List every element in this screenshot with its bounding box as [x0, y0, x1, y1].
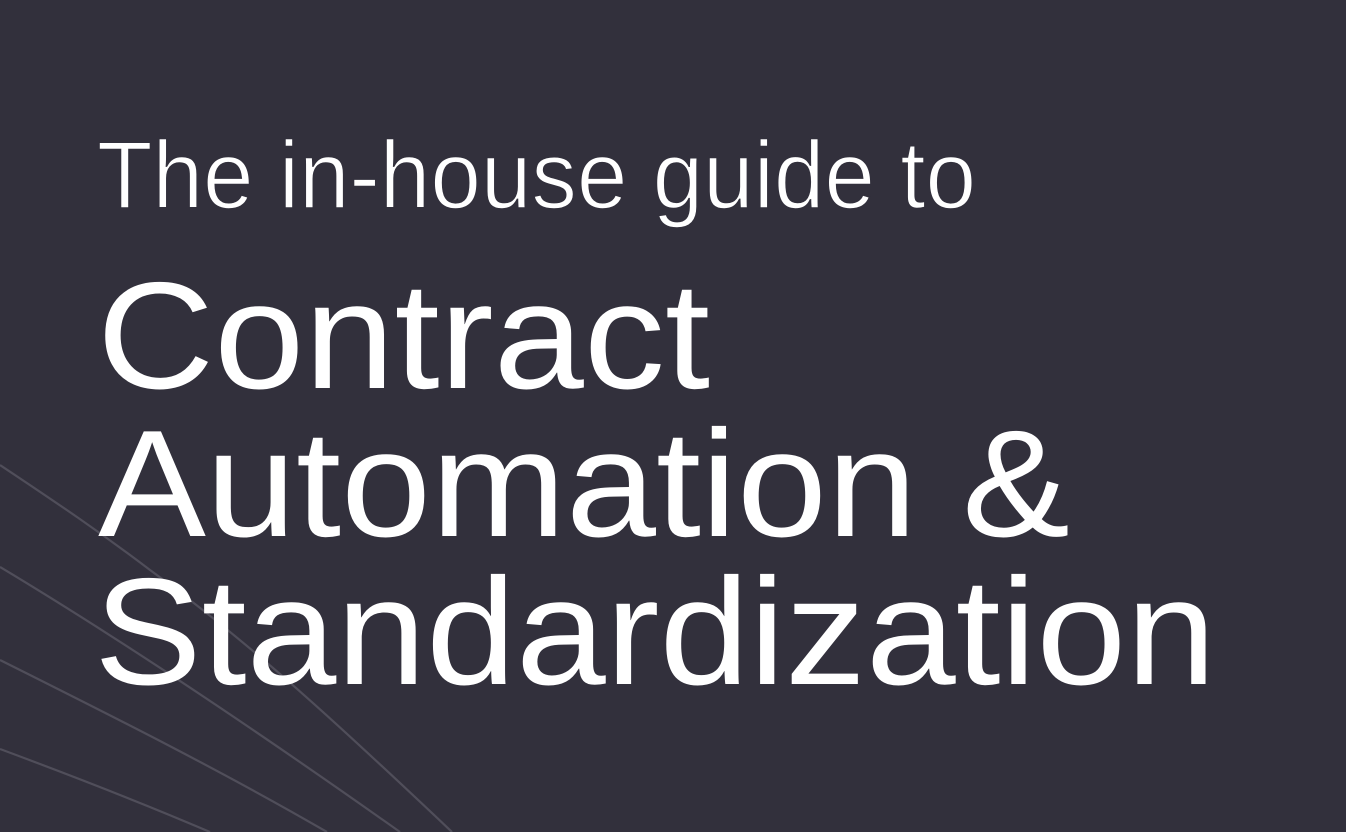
title: Automation &: [98, 399, 1070, 569]
title: Contract: [97, 251, 710, 421]
title: [94, 251, 1216, 717]
title: Standardization: [94, 547, 1216, 717]
subtitle: The in-house guide to: [97, 122, 976, 229]
